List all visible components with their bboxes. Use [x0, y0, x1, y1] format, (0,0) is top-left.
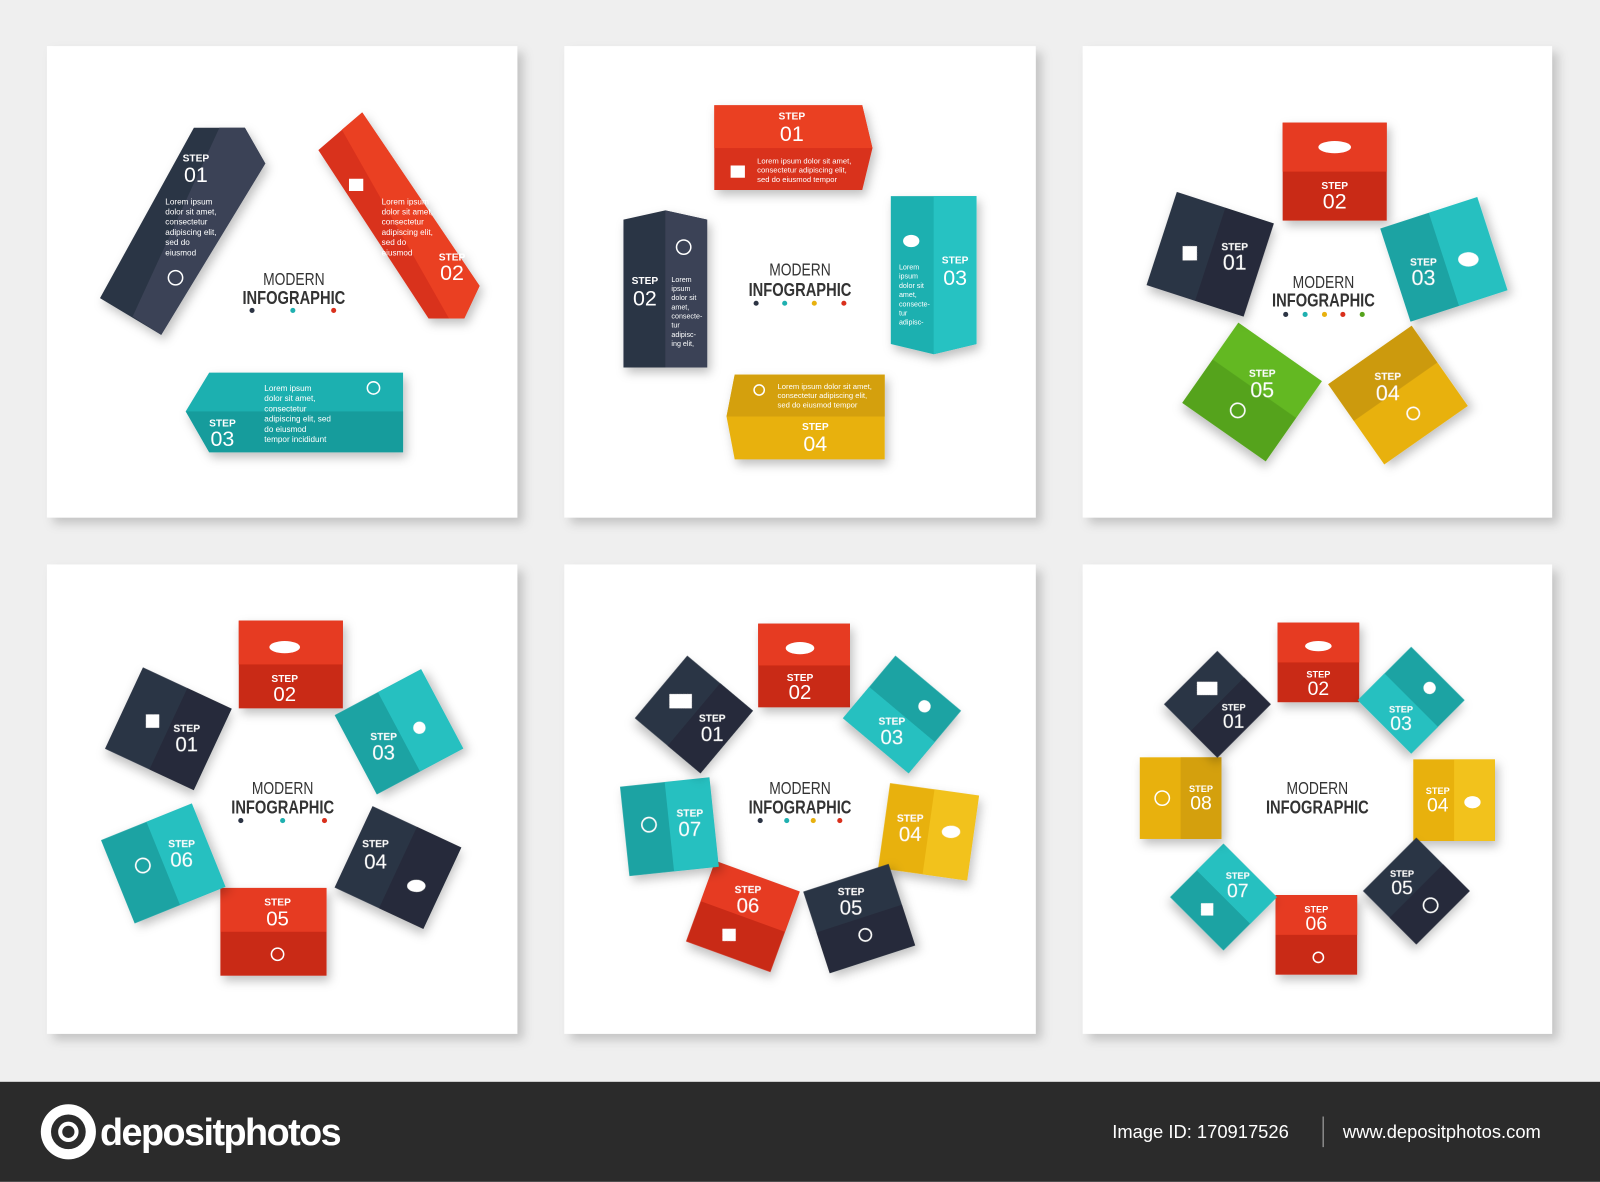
step 01 dark bar: dolor sit amet,	[165, 207, 217, 216]
step 06 red: 06	[737, 895, 759, 917]
step 02 red: STEP	[787, 673, 814, 684]
center title: MODERN	[252, 780, 313, 798]
step 03 teal bar: dolor sit amet,	[264, 394, 316, 403]
step 04 yellow: 04	[899, 824, 922, 846]
step 03 teal: 03	[1412, 266, 1435, 290]
step 01 dark: 01	[1223, 251, 1247, 275]
step 01 dark bar: adipiscing elit,	[165, 228, 217, 237]
step 01 dark bar: eiusmod	[165, 248, 197, 257]
brand name: depositphotos	[100, 1111, 341, 1153]
step 02 red bar: consectetur	[382, 218, 424, 227]
step 03 teal: STEP	[1410, 257, 1437, 268]
step 02 red bar: STEP	[439, 252, 466, 263]
panel 4: six steps	[47, 564, 517, 1034]
center title: MODERN	[769, 780, 831, 798]
panel 2: four steps	[564, 46, 1036, 518]
step 02 red bar: Lorem ipsum	[382, 197, 429, 206]
center title	[242, 271, 345, 313]
step 06 red: STEP	[1304, 904, 1328, 914]
step 02 dark	[623, 210, 707, 368]
step 03 teal: STEP	[879, 717, 905, 728]
step 04 dark	[335, 806, 461, 929]
panel 6: eight steps	[1083, 564, 1552, 1034]
step 08 yellow: 08	[1190, 792, 1212, 814]
step 06 red	[686, 861, 800, 972]
step 03 teal bar: STEP	[209, 419, 236, 430]
step 03 teal	[1356, 647, 1467, 758]
step 03 teal	[335, 669, 463, 794]
step 01 dark	[1164, 651, 1272, 759]
step 04 yellow: sed do eiusmod tempor	[778, 400, 858, 409]
step 04 yellow: STEP	[802, 422, 829, 433]
step 03 teal bar: consectetur	[264, 404, 307, 413]
step 04 yellow	[1328, 326, 1468, 464]
step 07 teal: 07	[1227, 880, 1249, 902]
step 02 dark: 02	[633, 286, 657, 310]
step 03 teal: STEP	[942, 255, 969, 266]
center title: INFOGRAPHIC	[231, 797, 334, 818]
step 02 red: STEP	[271, 674, 298, 685]
step 04 yellow	[878, 783, 979, 881]
center title: INFOGRAPHIC	[1272, 290, 1375, 311]
step 02 dark: ing elit,	[671, 340, 694, 348]
step 02 red: STEP	[1306, 670, 1330, 680]
step 02 red: 02	[1323, 189, 1347, 213]
step 07 teal: 07	[678, 819, 701, 841]
step 05 dark	[1363, 838, 1470, 944]
step 01 dark	[1147, 192, 1274, 317]
step 02 dark: amet,	[671, 303, 689, 311]
step 01 dark	[105, 667, 232, 790]
step 01 dark: STEP	[173, 724, 200, 735]
step 03 teal: tur	[899, 309, 908, 317]
step 02 dark: ipsum	[671, 285, 690, 293]
center title: INFOGRAPHIC	[749, 280, 851, 301]
step 01 dark bar	[100, 128, 265, 335]
step 01 dark bar: consectetur	[165, 218, 208, 227]
step 01 dark: 01	[1223, 711, 1244, 733]
step 02 red	[1278, 623, 1359, 702]
step 01 red: consectetur adipiscing elit,	[757, 166, 847, 175]
step 01 dark bar: STEP	[183, 153, 209, 164]
step 05 dark: STEP	[838, 887, 865, 898]
step 02 red	[239, 621, 343, 708]
center title: MODERN	[769, 261, 831, 280]
step 05 dark: STEP	[1390, 869, 1414, 879]
step 03 teal: adipisc-	[899, 319, 924, 327]
step 07 teal	[620, 777, 719, 876]
step 01 red: sed do eiusmod tempor	[757, 175, 837, 184]
step 02 red: STEP	[1321, 181, 1348, 192]
step 02 dark: consecte-	[671, 313, 703, 321]
center title	[1272, 274, 1375, 317]
step 03 teal: 03	[943, 266, 967, 290]
step 05 dark: 05	[1391, 877, 1413, 899]
panel 3: five steps	[1083, 46, 1552, 518]
footer bar	[0, 1082, 1600, 1182]
center title: INFOGRAPHIC	[242, 288, 345, 309]
website: www.depositphotos.com	[1342, 1121, 1541, 1142]
step 04 dark: 04	[364, 852, 387, 874]
step 02 red bar	[318, 112, 480, 319]
step 03 teal: STEP	[1389, 704, 1413, 714]
center title	[1266, 780, 1369, 818]
step 03 teal: consecte-	[899, 300, 930, 308]
center title: MODERN	[1293, 274, 1354, 292]
step 03 teal	[842, 656, 962, 775]
step 01 dark bar: Lorem ipsum	[165, 197, 213, 206]
step 07 teal	[1170, 844, 1277, 951]
image id: Image ID: 170917526	[1112, 1121, 1289, 1142]
step 02 red bar: sed do	[382, 238, 407, 247]
step 08 yellow: STEP	[1189, 784, 1213, 794]
step 03 teal: amet,	[899, 291, 917, 299]
step 02 red bar: adipiscing elit,	[382, 228, 433, 237]
step 02 dark: adipisc-	[671, 331, 697, 339]
step 01 dark: STEP	[1222, 702, 1246, 712]
step 03 teal: 03	[880, 727, 903, 749]
step 03 teal: Lorem	[899, 264, 919, 272]
step 01 dark bar: sed do	[165, 238, 190, 247]
step 03 teal: 03	[1390, 713, 1412, 735]
step 06 red: STEP	[735, 885, 761, 896]
step 02 red: 02	[273, 684, 296, 706]
step 01 dark	[635, 656, 754, 774]
step 04 dark: STEP	[362, 839, 389, 850]
center title	[749, 261, 851, 306]
step 02 dark: Lorem	[671, 276, 692, 284]
step 06 red	[1276, 895, 1357, 975]
step 04 yellow: consectetur adipiscing elit,	[778, 391, 867, 400]
step 04 yellow: STEP	[897, 814, 924, 825]
step 05 dark: 05	[840, 897, 862, 919]
step 07 teal: STEP	[676, 809, 703, 820]
step 05 dark	[803, 864, 915, 973]
step 06 teal: STEP	[168, 839, 195, 850]
step 04 yellow: 04	[1427, 794, 1449, 816]
step 01 dark: STEP	[1221, 242, 1248, 253]
step 04 yellow	[1413, 759, 1495, 841]
step 01 red: Lorem ipsum dolor sit amet,	[757, 156, 851, 165]
step 02 red: 02	[1308, 678, 1329, 700]
step 01 red	[714, 105, 872, 190]
center title: INFOGRAPHIC	[749, 797, 851, 818]
step 02 dark: STEP	[632, 276, 658, 287]
step 02 red	[1283, 123, 1387, 221]
step 03 teal bar: adipiscing elit, sed	[264, 415, 331, 424]
step 03 teal bar: Lorem ipsum	[264, 384, 312, 393]
panel 5: seven steps	[564, 564, 1036, 1034]
step 03 teal bar: tempor incididunt	[264, 435, 327, 444]
step 04 yellow: STEP	[1426, 786, 1450, 796]
step 01 dark: 01	[175, 734, 198, 756]
step 02 red: 02	[789, 682, 811, 704]
panel 1: three steps	[47, 46, 517, 518]
center title: MODERN	[1287, 780, 1348, 798]
step 01 red: STEP	[779, 112, 805, 123]
step 01 dark: STEP	[699, 714, 726, 725]
step 01 red: 01	[780, 122, 804, 146]
step 03 teal bar: do eiusmod	[264, 425, 307, 434]
step 06 teal: 06	[170, 850, 193, 872]
step 04 yellow: 04	[803, 432, 827, 456]
center title: INFOGRAPHIC	[1266, 797, 1369, 818]
step 03 teal bar	[186, 373, 403, 452]
step 01 dark: 01	[701, 724, 724, 746]
step 05 red	[220, 888, 327, 976]
step 03 teal: dolor sit	[899, 282, 924, 290]
step 02 red bar: 02	[440, 261, 464, 285]
step 05 green	[1182, 323, 1322, 461]
step 03 teal	[891, 196, 977, 354]
step 05 green: 05	[1250, 378, 1274, 402]
step 03 teal	[1380, 197, 1508, 322]
step 04 yellow: 04	[1376, 381, 1400, 405]
step 01 dark bar: 01	[184, 163, 208, 187]
center title	[231, 780, 334, 823]
step 02 red bar: eiusmod	[382, 248, 413, 257]
step 05 green: STEP	[1249, 369, 1276, 380]
step 05 red: 05	[266, 909, 289, 931]
center title: MODERN	[263, 271, 325, 289]
step 02 red bar: dolor sit amet,	[382, 207, 433, 216]
step 06 teal	[101, 803, 225, 923]
step 07 teal: STEP	[1226, 871, 1250, 881]
step 05 red: STEP	[264, 897, 291, 908]
step 03 teal: STEP	[370, 732, 397, 743]
step 04 yellow: STEP	[1374, 372, 1401, 383]
step 04 yellow: Lorem ipsum dolor sit amet,	[778, 382, 872, 391]
step 02 dark: dolor sit	[671, 294, 696, 302]
step 03 teal: 03	[372, 742, 395, 764]
step 03 teal: ipsum	[899, 273, 918, 281]
step 03 teal bar: 03	[211, 427, 234, 451]
center title	[749, 780, 851, 823]
step 02 dark: tur	[671, 322, 680, 330]
step 06 red: 06	[1306, 913, 1327, 935]
step 08 yellow	[1140, 757, 1221, 839]
icon: camera logo	[41, 1104, 96, 1159]
step 02 red	[758, 624, 850, 707]
step 04 yellow	[727, 375, 885, 459]
